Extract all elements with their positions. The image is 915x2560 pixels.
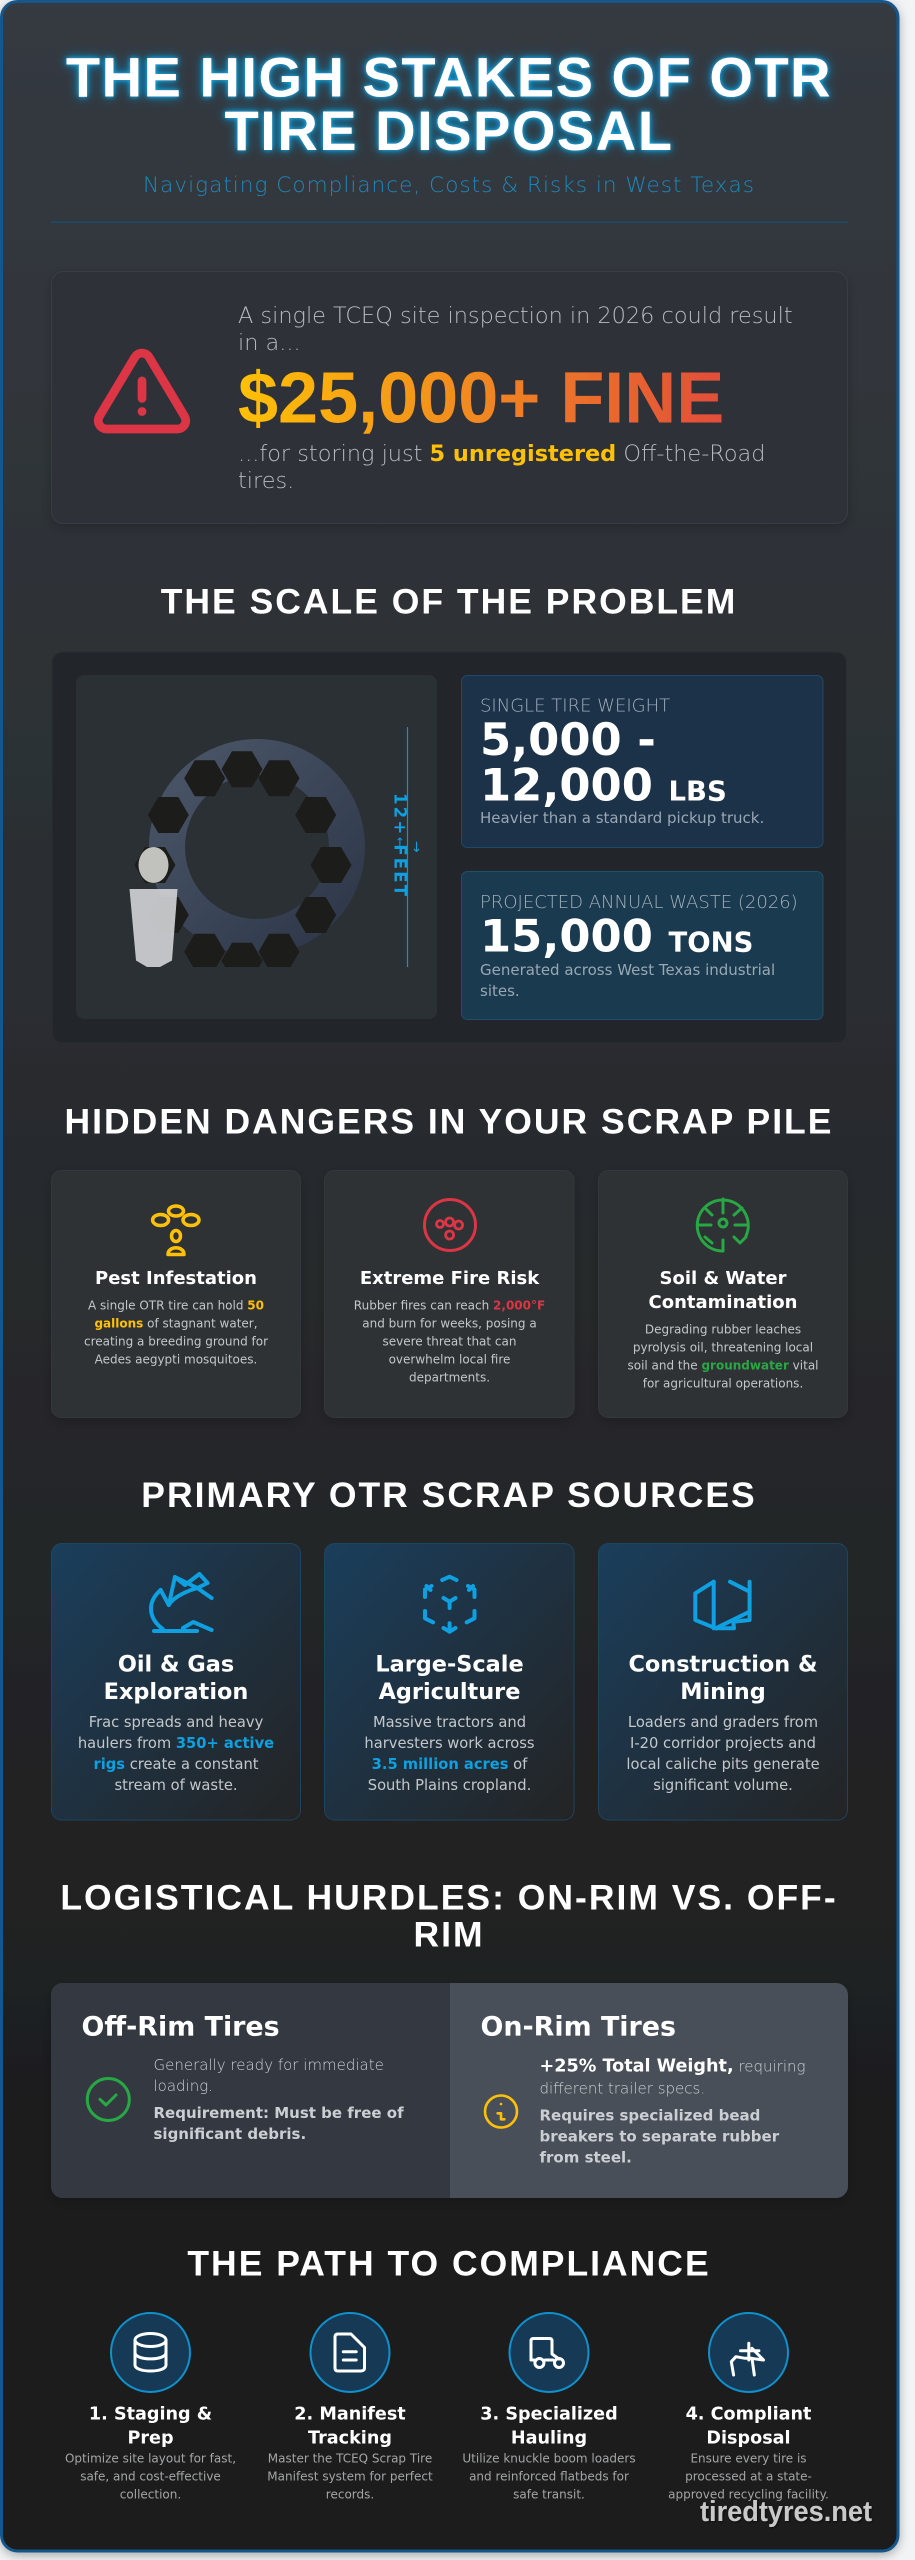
- title: THE HIGH STAKES OF OTR: [66, 46, 832, 108]
- panel: soil and water: Contamination: [649, 1292, 797, 1313]
- card text: [627, 1322, 819, 1390]
- card text: Aedes aegypti mosquitoes.: [95, 1352, 257, 1366]
- card text: Rubber fires can reach 2,000°F: [354, 1298, 545, 1312]
- dimension line and label: ↓: [411, 840, 422, 856]
- heading: scale of the problem: THE SCALE OF THE PROBLEM: [161, 582, 737, 622]
- icon: warning triangle: [98, 353, 186, 429]
- dimension line and label: 12+ FEET: [390, 793, 410, 898]
- step text: [668, 2452, 829, 2502]
- icon: soil: [697, 1199, 748, 1251]
- dimension line and label: [390, 727, 422, 967]
- card text: South Plains cropland.: [368, 1777, 531, 1794]
- stat card: annual waste: Generated across West Texas industrial: [480, 961, 775, 979]
- on-rim column: +25% Total Weight, requiring: [540, 2056, 806, 2076]
- card text: [78, 1714, 274, 1794]
- step 3: [462, 2313, 636, 2502]
- icon: construction: [695, 1582, 750, 1628]
- card text: Degrading rubber leaches: [645, 1322, 801, 1336]
- alert lead text: A single TCEQ site inspection in 2026 could result: [238, 303, 793, 329]
- on-rim column: from steel.: [540, 2148, 632, 2166]
- header: [51, 46, 848, 223]
- heading: path to compliance: THE PATH TO COMPLIANCE: [187, 2244, 711, 2284]
- panel: pest infestation: Pest Infestation: [95, 1268, 257, 1289]
- stat card: weight: 12,000 LBS: [480, 758, 727, 812]
- off-rim column: Off-Rim Tires: [82, 2012, 280, 2042]
- stat card: weight: 5,000 -: [480, 713, 656, 766]
- step text: Ensure every tire is: [690, 2452, 807, 2466]
- panel: oil and gas: Oil & Gas: [118, 1652, 234, 1678]
- panel: oil and gas: Exploration: [104, 1679, 248, 1705]
- step 3: Hauling: [511, 2428, 587, 2448]
- card text: stream of waste.: [114, 1777, 238, 1794]
- step text: safe, and cost-effective: [80, 2470, 221, 2484]
- panel: agriculture: [324, 1544, 574, 1820]
- off-rim column: [82, 2012, 404, 2143]
- alert follow-up text: tires.: [238, 468, 294, 494]
- watermark: tiredtyres.net: [700, 2496, 872, 2528]
- icon: pest: [153, 1206, 199, 1254]
- panel: agriculture: Agriculture: [379, 1679, 520, 1705]
- dimension line and label: ←: [393, 837, 407, 847]
- step text: approved recycling facility.: [668, 2488, 829, 2502]
- step 2: Tracking: [308, 2428, 392, 2448]
- card text: 3.5 million acres of: [372, 1756, 528, 1773]
- title: [66, 46, 832, 162]
- stat card: weight: Heavier than a standard pickup truck.: [480, 809, 764, 827]
- card text: significant volume.: [653, 1777, 793, 1794]
- on-rim column: On-Rim Tires: [480, 2012, 676, 2042]
- card text: harvesters work across: [364, 1735, 535, 1752]
- step text: Utilize knuckle boom loaders: [462, 2452, 636, 2466]
- alert lead text: in a...: [238, 330, 301, 356]
- card text: overwhelm local fire: [389, 1352, 510, 1366]
- alert lead text: [238, 303, 793, 356]
- panel: construction: Mining: [680, 1679, 766, 1705]
- step text: safe transit.: [513, 2488, 585, 2502]
- panel: fire risk: Extreme Fire Risk: [360, 1268, 540, 1289]
- on-rim column: [480, 2012, 806, 2166]
- step text: and reinforced flatbeds for: [469, 2470, 629, 2484]
- panel: agriculture: Large-Scale: [375, 1652, 524, 1678]
- person: [130, 847, 178, 967]
- stat card: annual waste: [462, 872, 823, 1020]
- icon: fire: [424, 1200, 476, 1250]
- icon: database: [135, 2334, 166, 2371]
- step 1: Prep: [127, 2428, 174, 2448]
- card text: for agricultural operations.: [643, 1376, 803, 1390]
- fine amount: $25,000+ FINE: [238, 358, 724, 438]
- subtitle: Navigating Compliance, Costs & Risks in West Texas: [143, 173, 755, 198]
- alert follow-up text: ...for storing just 5 unregistered Off-the-Road: [238, 441, 765, 467]
- panel: pest infestation: [52, 1170, 300, 1418]
- icon: truck: [531, 2338, 564, 2368]
- step 2: [267, 2313, 433, 2502]
- panel: rim comparison: [51, 1983, 848, 2198]
- card text: Frac spreads and heavy: [89, 1714, 264, 1731]
- panel: fine alert: [52, 272, 848, 524]
- panel: oil and gas: [52, 1544, 300, 1820]
- card text: soil and the groundwater vital: [627, 1358, 819, 1372]
- card text: creating a breeding ground for: [84, 1334, 268, 1348]
- card text: Loaders and graders from: [628, 1714, 818, 1731]
- card text: pyrolysis oil, threatening local: [633, 1340, 813, 1354]
- step text: Optimize site layout for fast,: [65, 2452, 236, 2466]
- title: TIRE DISPOSAL: [225, 99, 673, 162]
- icon: recycling: [731, 2343, 764, 2375]
- step text: processed at a state-: [685, 2470, 812, 2484]
- tire: [134, 751, 352, 979]
- panel: scale: [52, 652, 846, 1043]
- step 1: 1. Staging &: [89, 2404, 212, 2424]
- card text: and burn for weeks, posing a: [362, 1316, 537, 1330]
- step 1: [65, 2313, 236, 2502]
- heading: hidden dangers: HIDDEN DANGERS IN YOUR SCRAP PILE: [65, 1102, 833, 1142]
- stat card: annual waste: PROJECTED ANNUAL WASTE (2026): [480, 892, 798, 913]
- on-rim column: different trailer specs.: [540, 2080, 705, 2098]
- panel: soil and water: [598, 1170, 848, 1418]
- stat card: weight: SINGLE TIRE WEIGHT: [480, 696, 670, 716]
- off-rim column: Requirement: Must be free of: [154, 2104, 404, 2122]
- card text: haulers from 350+ active: [78, 1735, 274, 1752]
- heading: logistical hurdles: LOGISTICAL HURDLES: ON-RIM VS. OFF-: [60, 1878, 838, 1918]
- stat card: annual waste: 15,000 TONS: [480, 910, 753, 962]
- on-rim column: breakers to separate rubber: [540, 2128, 780, 2146]
- step text: [267, 2452, 433, 2502]
- icon: document: [335, 2334, 364, 2371]
- off-rim column: significant debris.: [154, 2125, 306, 2143]
- step 4: Disposal: [706, 2428, 791, 2448]
- stat card: weight: [462, 676, 823, 848]
- card text: severe threat that can: [383, 1334, 516, 1348]
- card text: [626, 1714, 820, 1794]
- heading: scrap sources: PRIMARY OTR SCRAP SOURCES: [141, 1475, 757, 1515]
- step 4: [668, 2313, 829, 2502]
- panel: soil and water: Soil & Water: [660, 1268, 787, 1289]
- step text: Master the TCEQ Scrap Tire: [268, 2452, 432, 2466]
- step text: records.: [326, 2488, 374, 2502]
- stat card: annual waste: sites.: [480, 982, 520, 1000]
- card text: local caliche pits generate: [626, 1756, 820, 1773]
- icon: info: [485, 2096, 517, 2128]
- card text: [354, 1298, 545, 1384]
- icon: oil derrick: [151, 1574, 212, 1631]
- card text: [84, 1298, 268, 1366]
- tire scale diagram: [76, 675, 437, 1019]
- on-rim column: Requires specialized bead: [540, 2106, 760, 2124]
- step 2: 2. Manifest: [294, 2404, 406, 2424]
- panel: construction: Construction &: [628, 1652, 818, 1678]
- card text: gallons of stagnant water,: [94, 1316, 258, 1330]
- step text: [65, 2452, 236, 2502]
- panel: construction: [598, 1544, 848, 1820]
- step text: [462, 2452, 636, 2502]
- icon: check: [87, 2078, 129, 2120]
- card text: rigs create a constant: [93, 1756, 259, 1773]
- off-rim column: Generally ready for immediate: [154, 2056, 384, 2074]
- heading: logistical hurdles: RIM: [413, 1914, 485, 1954]
- panel: fire risk: [324, 1170, 574, 1418]
- step 4: 4. Compliant: [686, 2404, 811, 2424]
- step text: collection.: [120, 2488, 181, 2502]
- card text: departments.: [409, 1370, 490, 1384]
- card text: A single OTR tire can hold 50: [88, 1298, 264, 1312]
- card text: Massive tractors and: [373, 1714, 526, 1731]
- off-rim column: loading.: [154, 2077, 213, 2095]
- heading: logistical hurdles: [60, 1878, 838, 1954]
- step text: Manifest system for perfect: [267, 2470, 433, 2484]
- icon: agriculture: [425, 1577, 474, 1632]
- step 3: 3. Specialized: [480, 2404, 618, 2424]
- card text: I-20 corridor projects and: [630, 1735, 816, 1752]
- card text: [364, 1714, 535, 1794]
- alert follow-up text: [238, 441, 765, 494]
